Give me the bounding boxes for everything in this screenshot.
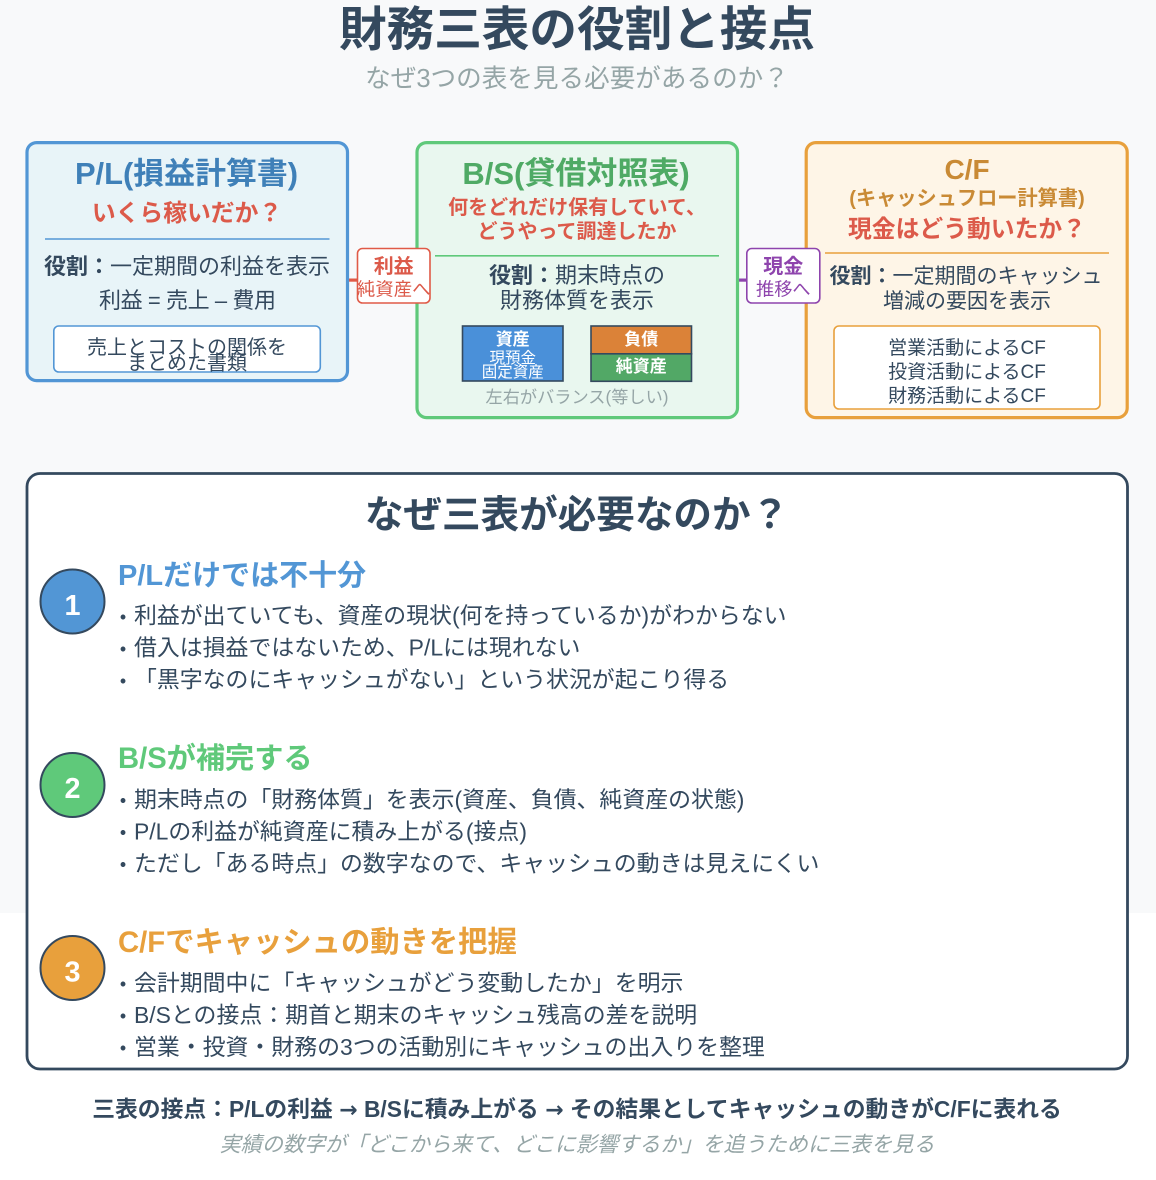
C/F question: 現金はどう動いたか？ — [848, 216, 1086, 243]
title: 財務三表の役割と接点 — [339, 4, 815, 57]
connector: B/S to C/F — [738, 278, 748, 282]
section 1 bullets: • — [120, 639, 126, 659]
section 3 bullets: 会計期間中に「キャッシュがどう変動したか」を明示 — [134, 970, 683, 996]
label: 利益 to 純資産 — [357, 248, 430, 303]
assets block: 固定資産 — [482, 363, 544, 381]
section 3 bullets: 営業・投資・財務の3つの活動別にキャッシュの出入りを整理 — [134, 1034, 765, 1060]
P/L note box: 売上とコストの関係を — [87, 336, 287, 359]
B/S question: 何をどれだけ保有していて、 — [448, 196, 706, 219]
panel: B/S — [417, 143, 738, 418]
section 1 bullets: 利益が出ていても、資産の現状(何を持っているか)がわからない — [134, 603, 787, 629]
panel: C/F: 増減の要因を表示 — [883, 290, 1051, 313]
label: 現金 to 推移: 現金 — [763, 255, 803, 278]
section 2 bullets — [120, 786, 819, 876]
B/S heading: B/S(貸借対照表) — [462, 156, 690, 191]
section 3 bullets: • — [120, 1006, 126, 1026]
C/F activities box: 営業活動によるCF — [888, 337, 1046, 359]
section 3 bullets: • — [120, 974, 126, 994]
assets block: 資産 — [496, 330, 530, 349]
section 2 bullets: • — [120, 854, 126, 874]
P/L question: いくら稼いだか？ — [92, 200, 282, 227]
section 3 bullets — [120, 970, 765, 1060]
panel heading: なぜ三表が必要なのか？ — [365, 494, 789, 537]
section 3 bullets: • — [120, 1038, 126, 1058]
section 2 — [40, 741, 819, 876]
P/L note box: まとめた書類 — [127, 352, 247, 374]
assets block: 現預金 — [489, 349, 536, 367]
section 2 bullets: 期末時点の「財務体質」を表示(資産、負債、純資産の状態) — [134, 786, 744, 812]
panel: B/S: どうやって調達したか — [478, 220, 676, 243]
C/F activities box: 投資活動によるCF — [888, 361, 1046, 383]
number badge 2: 2 — [64, 773, 81, 805]
number badge 1: 1 — [64, 590, 81, 622]
C/F subheading: (キャッシュフロー計算書) — [849, 187, 1085, 210]
section 1 bullets — [120, 603, 787, 693]
number badge 2 — [40, 753, 104, 817]
assets block — [462, 326, 563, 381]
liabilities block — [591, 326, 692, 354]
label: 利益 to 純資産: 純資産へ — [357, 279, 430, 300]
footer summary: 三表の接点：P/Lの利益 → B/Sに積み上がる → その結果としてキャッシュの動きがC/Fに表れる — [92, 1096, 1062, 1123]
number badge 3: 3 — [64, 956, 81, 988]
connector: P/L to B/S — [348, 278, 358, 282]
label: 現金 to 推移: 推移へ — [756, 280, 811, 300]
P/L role: 役割：一定期間の利益を表示 — [44, 254, 330, 279]
section 2 bullets: P/Lの利益が純資産に積み上がる(接点) — [134, 818, 527, 844]
section 3 — [40, 926, 765, 1060]
panel: C/F — [806, 143, 1127, 418]
P/L note box — [54, 326, 320, 374]
equity block — [591, 354, 692, 381]
number badge 3 — [40, 936, 104, 1000]
label: 利益 to 純資産: 利益 — [374, 255, 414, 278]
subtitle: なぜ3つの表を見る必要があるのか？ — [365, 64, 789, 93]
equity block: 純資産 — [616, 357, 667, 376]
section 1 bullets: • — [120, 671, 126, 691]
section 2 bullets: • — [120, 790, 126, 810]
section 1 bullets: 借入は損益ではないため、P/Lには現れない — [134, 635, 580, 661]
section 1 heading: P/Lだけでは不十分 — [118, 559, 366, 592]
panel: why three statements — [27, 474, 1128, 1069]
C/F heading: C/F — [944, 154, 990, 185]
section 2 bullets: ただし「ある時点」の数字なので、キャッシュの動きは見えにくい — [134, 850, 819, 876]
panel: P/L — [27, 143, 348, 381]
P/L heading: P/L(損益計算書) — [75, 156, 298, 191]
number badge 1 — [40, 570, 104, 634]
liabilities block: 負債 — [624, 330, 658, 349]
section 1 — [40, 559, 787, 693]
B/S role: 役割：期末時点の — [489, 263, 665, 288]
footer note: 実績の数字が「どこから来て、どこに影響するか」を追うために三表を見る — [220, 1134, 934, 1156]
C/F activities box — [834, 326, 1100, 409]
label: 現金 to 推移 — [747, 248, 820, 303]
C/F activities box: 財務活動によるCF — [888, 385, 1046, 407]
section 3 heading: C/Fでキャッシュの動きを把握 — [118, 926, 517, 959]
balance note: 左右がバランス(等しい) — [486, 387, 668, 407]
section 1 bullets: 「黒字なのにキャッシュがない」という状況が起こり得る — [134, 667, 729, 693]
section 2 bullets: • — [120, 822, 126, 842]
section 3 bullets: B/Sとの接点：期首と期末のキャッシュ残高の差を説明 — [134, 1002, 697, 1028]
panel: B/S: 財務体質を表示 — [500, 288, 654, 313]
P/L formula: 利益 = 売上 – 費用 — [99, 288, 276, 313]
section 1 bullets: • — [120, 607, 126, 627]
C/F role: 役割：一定期間のキャッシュ — [830, 265, 1102, 288]
section 2 heading: B/Sが補完する — [118, 741, 313, 775]
